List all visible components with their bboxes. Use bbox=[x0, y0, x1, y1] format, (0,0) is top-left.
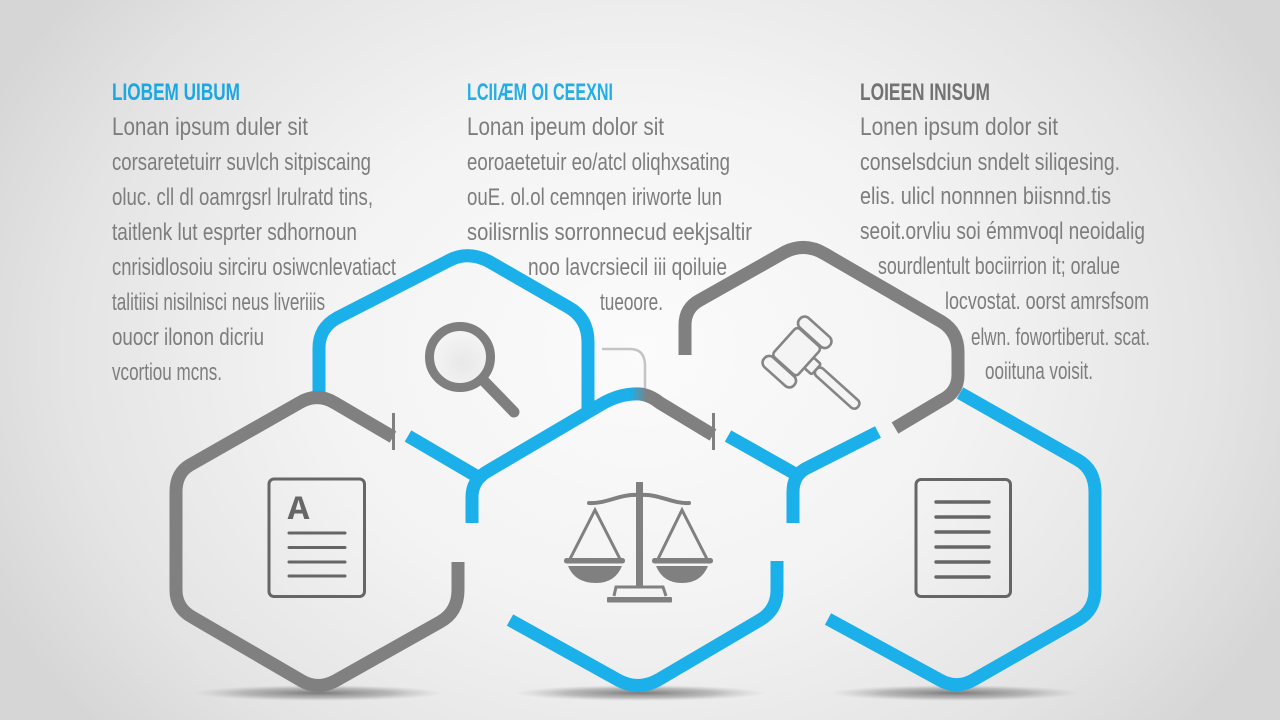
hexagon: top right gray bbox=[685, 247, 958, 428]
body text: left column: oluc. cll dl oamrgsrl lrulratd tins, bbox=[112, 184, 373, 211]
body text: left column: taitlenk lut esprter sdhornoun bbox=[112, 219, 357, 246]
body text: left column: Lonan ipsum duler sit bbox=[112, 113, 308, 141]
body text: middle column: Lonan ipeum dolor sit bbox=[467, 113, 664, 141]
connector end bar bbox=[392, 413, 395, 450]
text block: middle column bbox=[467, 79, 752, 316]
body text: left column: talitiisi nisilnisci neus liveriiis bbox=[112, 289, 325, 316]
heading: middle column: LCIIÆM OI CEEXNI bbox=[467, 79, 613, 106]
body text: middle column: ouE. ol.ol cemnqen iriworte lun bbox=[467, 184, 722, 211]
body text: middle column: soilisrnlis sorronnecud eekjsaltir bbox=[467, 219, 752, 246]
body text: right column bbox=[860, 113, 1150, 385]
body text: left column: ouocr ilonon dicriu bbox=[112, 324, 264, 351]
body text: left column: cnrisidlosoiu sirciru osiwcnlevatiact bbox=[112, 254, 396, 281]
body text: right column: conselsdciun sndelt siliqesing. bbox=[860, 149, 1120, 176]
body text: right column: seoit.orvliu soi émmvoql neoidalig bbox=[860, 218, 1145, 245]
body text: right column: elis. ulicl nonnnen biisnnd.tis bbox=[860, 183, 1111, 210]
icon: gavel bbox=[760, 314, 880, 431]
body text: right column: ooiituna voisit. bbox=[985, 358, 1093, 385]
icon: document with text lines bbox=[916, 480, 1010, 596]
hexagon: center blue bbox=[472, 394, 777, 686]
body text: right column: elwn. fowortiberut. scat. bbox=[971, 324, 1150, 351]
thin connector line bbox=[602, 349, 645, 392]
body text: right column: locvostat. oorst amrsfsom bbox=[945, 288, 1149, 315]
body text: left column: corsaretetuirr suvlch sitpiscaing bbox=[112, 149, 371, 176]
icon: document with letter A: A bbox=[288, 492, 310, 530]
heading: left column: LIOBEM UIBUM bbox=[112, 79, 240, 106]
heading: right column: LOIEEN INISUM bbox=[860, 79, 990, 106]
body text: middle column: noo lavcrsiecil iii qoiluie bbox=[528, 254, 727, 281]
connector end bar bbox=[712, 413, 715, 450]
icon: scales of justice bbox=[564, 482, 713, 602]
text block: right column bbox=[860, 79, 1150, 385]
icon: magnifying glass bbox=[430, 326, 514, 412]
body text: left column bbox=[112, 113, 396, 386]
hexagon: top left blue bbox=[319, 256, 588, 477]
body text: middle column: eoroaetetuir eo/atcl oliqhxsating bbox=[467, 149, 730, 176]
body text: middle column: tueoore. bbox=[600, 289, 663, 316]
hexagon: right blue bbox=[828, 393, 1095, 685]
text block: left column bbox=[112, 79, 396, 386]
icon: document with letter A bbox=[269, 479, 364, 596]
body text: right column: Lonen ipsum dolor sit bbox=[860, 113, 1058, 141]
body text: middle column bbox=[467, 113, 752, 316]
body text: right column: sourdlentult bociirrion it; oralue bbox=[878, 253, 1120, 280]
ground shadows bbox=[193, 685, 1080, 701]
hexagon: left gray bbox=[176, 398, 458, 686]
body text: left column: vcortiou mcns. bbox=[112, 359, 222, 386]
hexagon: lower middle blue junction bbox=[728, 432, 878, 523]
